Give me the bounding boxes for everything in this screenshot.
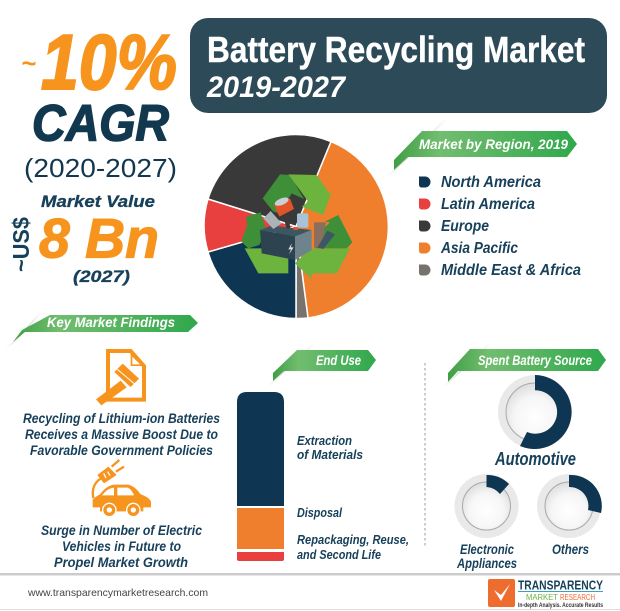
ribbon: end use: End Use xyxy=(316,353,361,368)
label: CAGR: CAGR xyxy=(32,94,169,152)
stacked bar chart: end use xyxy=(237,392,284,561)
ribbon: key market findings xyxy=(2,312,198,350)
text: finding one: Receives a Massive Boost Due to xyxy=(25,427,218,442)
bar segment: extraction of materials xyxy=(237,392,284,506)
text: finding one: Favorable Government Policies xyxy=(30,443,213,458)
recycling arrows xyxy=(241,174,352,279)
logo: transparency market research: MARKET xyxy=(526,593,558,602)
donut: automotive xyxy=(498,375,572,449)
title years: 2019-2027 xyxy=(206,71,346,104)
bar labels xyxy=(297,433,409,562)
label: electronic appliances xyxy=(456,542,517,571)
label: extraction: Extraction xyxy=(297,433,352,448)
label: automotive: Automotive xyxy=(494,449,576,469)
label: electronic appliances: Electronic xyxy=(460,542,514,557)
label: repackaging xyxy=(297,532,409,562)
legend item: Latin America: Latin America xyxy=(441,196,535,213)
ribbon: market by region xyxy=(380,118,577,180)
label: forecast period: (2020-2027) xyxy=(24,153,177,183)
legend item: Asia Pacific xyxy=(419,240,518,257)
icon: gavel on document xyxy=(96,351,144,405)
bar segment: disposal xyxy=(237,508,284,549)
legend item: North America: North America xyxy=(441,174,541,191)
headline stat: CAGR and market value xyxy=(8,18,177,286)
pie chart: market by region xyxy=(204,134,388,319)
text: finding one: Recycling of Lithium-ion Batteries xyxy=(23,411,220,426)
text: finding two xyxy=(41,523,202,570)
bar segment: repackaging xyxy=(237,552,284,561)
battery xyxy=(260,226,312,260)
stat: approx 10%: ~ xyxy=(21,48,36,78)
legend: regions xyxy=(419,174,581,279)
cells xyxy=(263,196,335,249)
footer URL: www.transparencymarketresearch.com xyxy=(27,587,208,599)
text: finding one xyxy=(23,411,220,458)
icon: recycling symbol with batteries xyxy=(241,174,352,279)
legend item: Europe xyxy=(419,218,489,235)
donut: electronic appliances xyxy=(454,474,518,538)
legend item: Asia Pacific: Asia Pacific xyxy=(440,240,518,257)
label: extraction xyxy=(297,433,363,462)
stat: 8 Bn: 8 Bn xyxy=(39,206,159,270)
logo: transparency market research xyxy=(488,578,604,609)
ribbon: spent battery source xyxy=(440,342,606,388)
label: repackaging: Repackaging, Reuse, xyxy=(297,532,409,547)
ribbon: market by region: Market by Region, 2019 xyxy=(419,136,568,152)
ribbon: end use xyxy=(264,342,376,389)
ribbon: key market findings: Key Market Findings xyxy=(47,314,175,330)
text: finding two: Vehicles in Future to xyxy=(62,539,181,554)
label: extraction: of Materials xyxy=(297,447,363,462)
label: market value: Market Value xyxy=(41,192,155,211)
label: electronic appliances: Appliances xyxy=(456,556,517,571)
label: others: Others xyxy=(552,542,589,557)
ribbon: spent battery source: Spent Battery Source xyxy=(478,353,592,368)
title panel xyxy=(190,18,607,113)
text: finding two: Surge in Number of Electric xyxy=(41,523,202,538)
stat: US$ prefix: ~US$ xyxy=(8,217,34,272)
footer xyxy=(0,573,620,610)
label: disposal: Disposal xyxy=(297,505,342,520)
logo: transparency market research: In-depth Analysis. Accurate Results xyxy=(518,603,604,609)
text: finding two: Propel Market Growth xyxy=(54,555,188,570)
label: 2027: (2027) xyxy=(73,267,130,286)
stat: approx 10%: 10% xyxy=(41,18,177,106)
legend item: Middle East and Africa: Middle East & Africa xyxy=(441,262,581,279)
legend item: Europe: Europe xyxy=(441,218,489,235)
donut: others xyxy=(537,474,602,538)
icon: electric car with plug xyxy=(93,460,151,517)
label: repackaging: and Second Life xyxy=(297,547,381,562)
logo: transparency market research: RESEARCH xyxy=(560,593,595,602)
